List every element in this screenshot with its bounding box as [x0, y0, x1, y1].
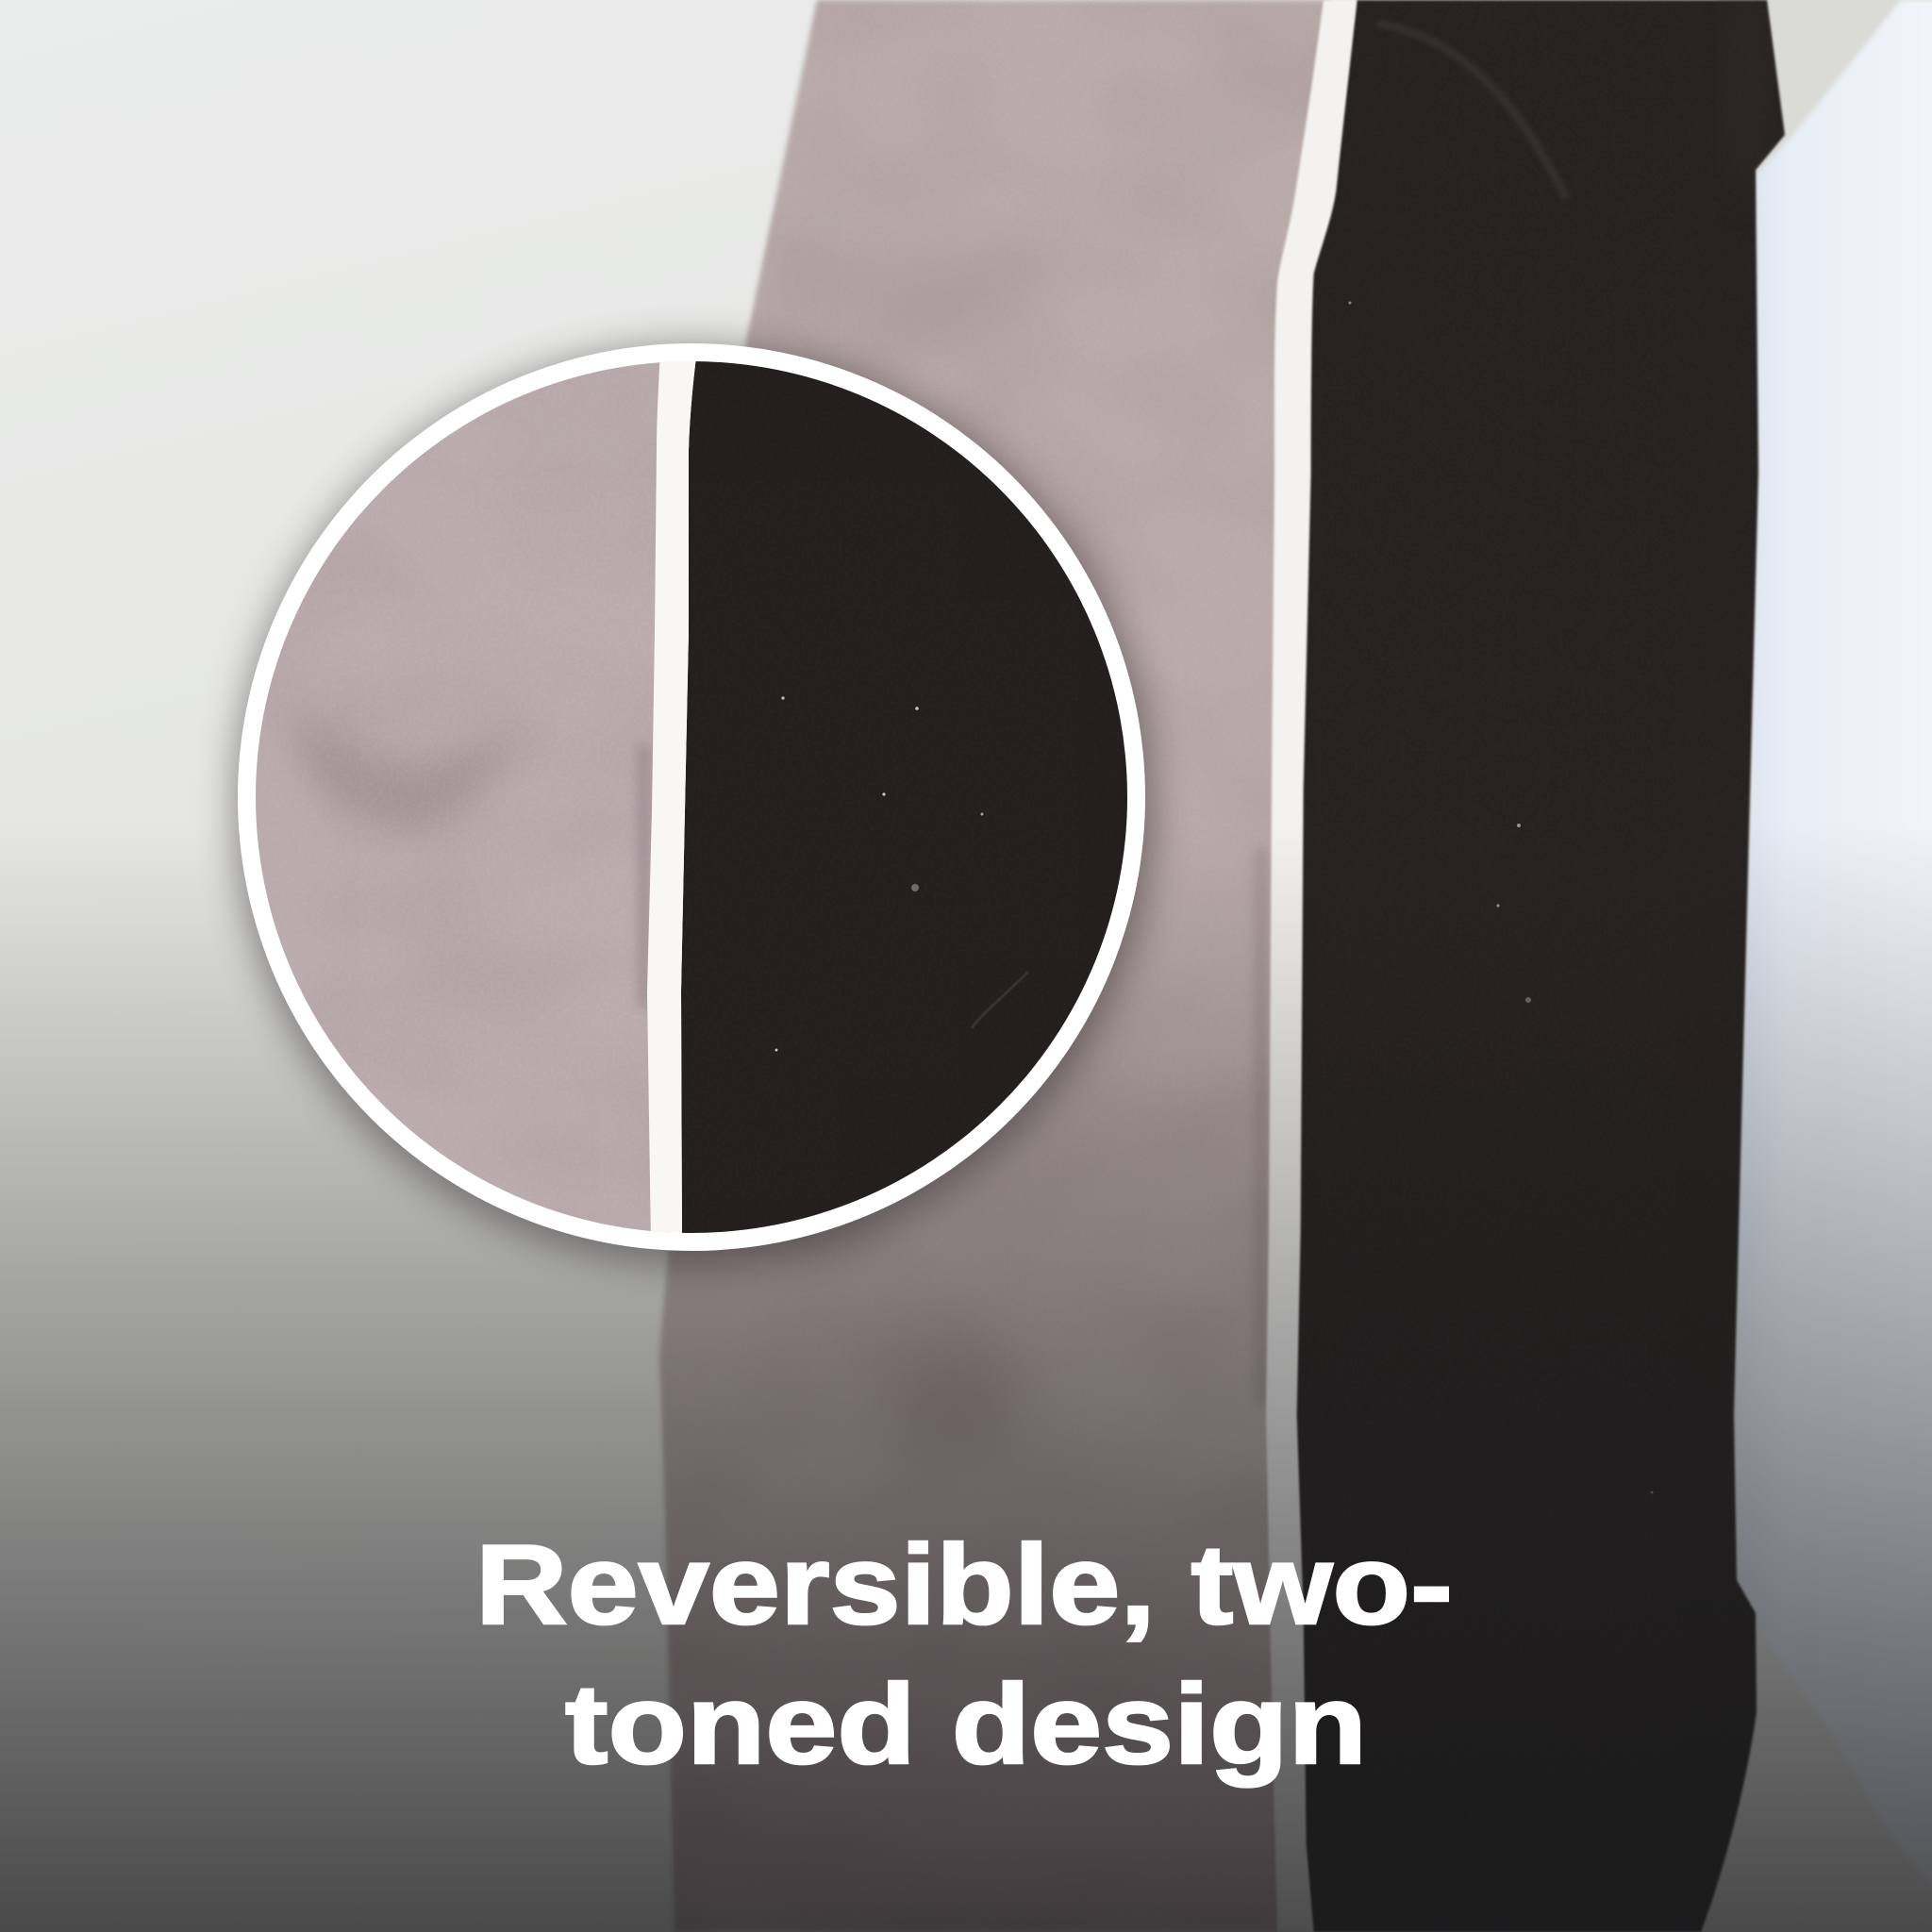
pillow: taupe side — [651, 0, 1340, 1932]
circular zoom lens — [233, 343, 1154, 1265]
white piping along pillow seam — [1266, 0, 1357, 1932]
white panel at right — [1734, 0, 1932, 1896]
heading: Reversible, two- — [475, 1522, 1453, 1648]
lens shadow — [233, 344, 1154, 1265]
lens close-up fabric — [245, 349, 1132, 1245]
heading: toned design — [565, 1661, 1367, 1788]
dark gradient overlay — [0, 821, 1932, 1932]
heading — [475, 1522, 1453, 1788]
pillow: black side — [1292, 0, 1792, 1932]
lens white ring — [238, 343, 1145, 1251]
